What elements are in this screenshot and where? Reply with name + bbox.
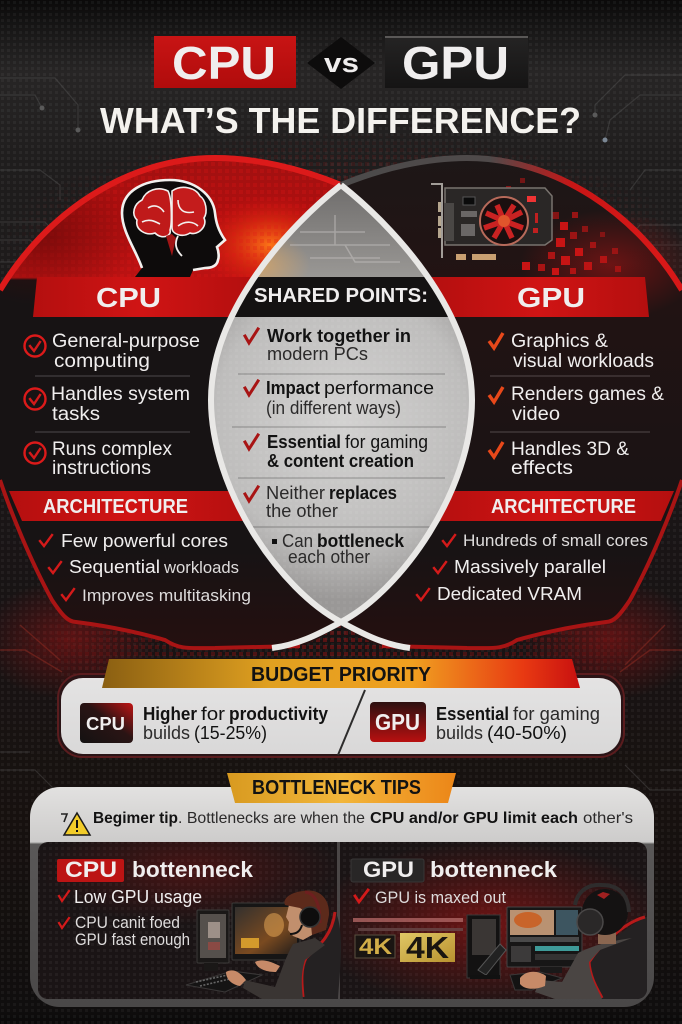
CPU badge: CPU <box>65 857 117 882</box>
beginner tip text: Begimer tip <box>93 810 178 827</box>
GPU budget text <box>436 704 600 743</box>
shared item: impact performance: performance <box>324 378 434 398</box>
GPU list <box>489 331 664 479</box>
GPU bottleneck point: GPU is maxed out <box>375 888 506 907</box>
budget banner <box>102 659 580 688</box>
CPU bottleneck heading: bottenneck <box>132 857 254 882</box>
beginner tip text: other's <box>583 810 633 827</box>
4K badges: 4K <box>359 934 392 959</box>
vs diamond: vs <box>324 48 359 78</box>
4K badges <box>355 930 455 965</box>
GPU bottleneck heading: bottenneck <box>430 857 558 882</box>
item: general-purpose computing: General-purpose <box>52 331 200 352</box>
beginner tip text: CPU and/or GPU limit each <box>370 810 578 827</box>
CPU list <box>24 331 200 479</box>
bottleneck banner <box>227 773 456 803</box>
GPU budget text: Essential <box>436 704 509 724</box>
shared item: can bottleneck: bottleneck <box>317 531 405 551</box>
shared item: impact performance: (in different ways) <box>266 398 401 418</box>
icon: brain head <box>122 180 225 277</box>
CPU badge <box>57 857 124 882</box>
GPU badge <box>351 857 424 882</box>
GPU architecture band <box>430 491 674 521</box>
panel: bottleneck tips <box>30 773 670 1010</box>
GPU budget text: (40-50%) <box>487 723 567 743</box>
header: CPU vs GPU <box>154 36 528 89</box>
CPU budget text: productivity <box>229 704 328 724</box>
CPU budget icon <box>80 703 133 743</box>
CPU heading band: CPU <box>96 282 161 313</box>
panel: GPU bottleneck <box>351 857 647 999</box>
item: sequential workloads: workloads <box>163 558 239 577</box>
GPU badge: GPU <box>363 857 414 882</box>
item: renders games and video: video <box>512 404 560 425</box>
CPU bottleneck points: GPU fast enough <box>75 930 190 949</box>
progress strips <box>353 918 463 931</box>
GPU budget icon: GPU <box>375 709 420 735</box>
GPU budget text: for gaming <box>513 704 600 724</box>
shared item: essential for gaming <box>245 432 428 471</box>
shared item: work together <box>245 326 411 364</box>
dividers <box>232 374 446 527</box>
shared item: neither replaces <box>245 483 397 521</box>
shared item: essential for gaming: Essential <box>267 432 341 452</box>
GPU title box: GPU <box>402 37 509 89</box>
CPU architecture band: ARCHITECTURE <box>43 496 188 518</box>
panel: GPU circle <box>341 158 682 648</box>
4K badges: 4K <box>406 930 450 965</box>
panel: CPU bottleneck <box>57 857 341 999</box>
title: WHAT’S THE DIFFERENCE? <box>100 100 581 141</box>
illustration: GPU editor at desk <box>467 885 647 999</box>
CPU budget text: builds <box>143 723 190 743</box>
item: handles 3D and effects: Handles 3D & <box>511 439 629 460</box>
item: hundreds of small cores: Hundreds of small cores <box>463 531 648 550</box>
item: runs complex instructions: Runs complex <box>52 439 172 460</box>
bottleneck banner: BOTTLENECK TIPS <box>252 777 421 799</box>
venn diagram <box>0 158 682 648</box>
item: sequential workloads: Sequential <box>69 557 160 577</box>
item: improves multitasking: Improves multitasking <box>82 586 251 605</box>
item: handles system tasks <box>24 384 190 425</box>
shared item: neither replaces: replaces <box>329 483 397 503</box>
shared item: work together: Work together in <box>267 326 411 346</box>
item: few powerful cores: Few powerful cores <box>61 531 228 551</box>
CPU title box <box>154 36 296 89</box>
item: handles 3D and effects: effects <box>511 458 573 479</box>
GPU architecture band: ARCHITECTURE <box>491 496 636 518</box>
CPU budget icon: CPU <box>86 714 125 734</box>
CPU budget text: Higher <box>143 704 197 724</box>
CPU heading band <box>33 277 250 317</box>
panel: CPU circle <box>0 158 345 648</box>
CPU budget text <box>143 704 328 743</box>
shared item: can bottleneck: each other <box>288 547 370 567</box>
item: runs complex instructions <box>24 439 172 479</box>
item: dedicated VRAM: Dedicated VRAM <box>437 584 582 604</box>
GPU heading band: GPU <box>517 282 585 313</box>
GPU title box <box>385 36 528 89</box>
item: graphics and visual workloads: visual workloads <box>513 351 654 372</box>
item: general-purpose computing: computing <box>54 351 150 372</box>
icon: warning triangle <box>61 813 90 835</box>
item: handles system tasks: tasks <box>52 404 100 425</box>
CPU architecture band <box>9 491 250 521</box>
shared item: essential for gaming: for gaming <box>345 432 428 452</box>
illustration: CPU gamer at desk <box>186 890 341 999</box>
CPU bottleneck points <box>59 887 202 949</box>
shared item: impact performance: Impact <box>266 378 320 398</box>
shared item: can bottleneck: Can <box>282 531 313 551</box>
shared item: work together: modern PCs <box>267 344 368 364</box>
GPU architecture list <box>417 531 648 604</box>
item: graphics and visual workloads <box>489 331 654 372</box>
budget banner: BUDGET PRIORITY <box>251 664 432 686</box>
panel: shared points lens <box>214 189 469 618</box>
item: handles 3D and effects <box>489 439 629 479</box>
shared item: can bottleneck <box>272 531 405 567</box>
item: general-purpose computing <box>24 331 200 372</box>
CPU architecture list <box>40 531 251 605</box>
item: renders games and video <box>489 384 664 425</box>
item: handles system tasks: Handles system <box>51 384 190 405</box>
CPU budget text: (15-25%) <box>194 723 267 743</box>
CPU title box: CPU <box>172 37 276 89</box>
shared item: impact performance <box>245 378 434 418</box>
beginner tip text: . Bottlenecks are when the <box>178 810 365 827</box>
GPU heading band <box>430 277 649 317</box>
CPU bottleneck points: CPU canit foed <box>75 913 180 932</box>
beginner tip text <box>93 810 633 827</box>
shared item: neither replaces: Neither <box>266 483 325 503</box>
GPU budget icon <box>370 702 426 742</box>
item: graphics and visual workloads: Graphics & <box>511 331 608 352</box>
shared item: neither replaces: the other <box>266 501 338 521</box>
panel: budget priority <box>58 659 624 757</box>
icon: graphics card <box>431 184 552 260</box>
item: runs complex instructions: instructions <box>52 458 151 479</box>
CPU bottleneck points: Low GPU usage <box>74 887 202 907</box>
item: massively parallel: Massively parallel <box>454 557 606 577</box>
item: sequential workloads <box>49 557 239 577</box>
shared points heading: SHARED POINTS: <box>254 285 428 307</box>
CPU budget text: for <box>201 704 225 724</box>
shared item: essential for gaming: & content creation <box>267 451 414 471</box>
GPU budget text: builds <box>436 723 483 743</box>
lens outline <box>211 185 472 648</box>
item: renders games and video: Renders games & <box>511 384 664 405</box>
vs diamond <box>307 37 375 89</box>
